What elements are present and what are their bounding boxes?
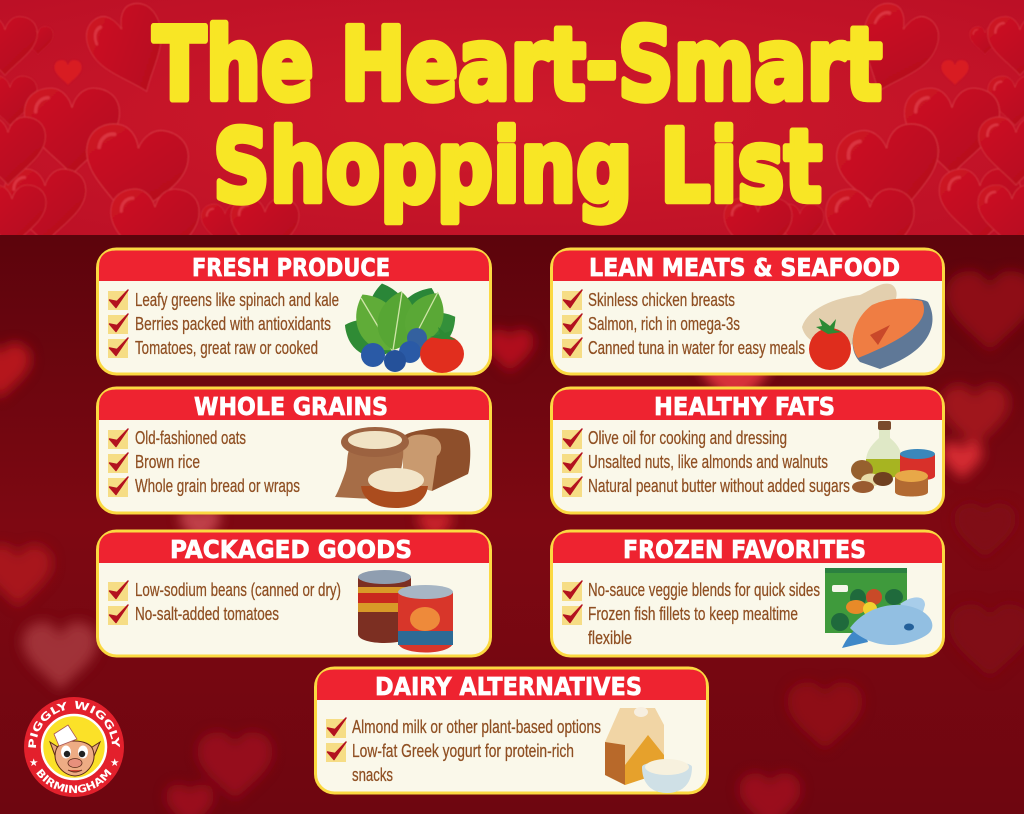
icon: milk carton and yogurt bowl bbox=[605, 707, 692, 793]
heading: lean meats and seafood: LEAN MEATS & SEAFOOD bbox=[589, 253, 900, 282]
checklist: whole grains: Old-fashioned oats bbox=[135, 427, 246, 448]
checklist: lean meats and seafood: Canned tuna in water for easy meals bbox=[588, 337, 805, 358]
checklist: frozen favorites: flexible bbox=[588, 627, 632, 648]
panel: lean meats and seafood bbox=[552, 249, 944, 374]
checklist: frozen favorites bbox=[562, 579, 820, 648]
heading: dairy alternatives: DAIRY ALTERNATIVES bbox=[375, 672, 642, 701]
heading: healthy fats: HEALTHY FATS bbox=[654, 392, 835, 421]
checklist: fresh produce: Berries packed with antioxidants bbox=[135, 313, 331, 334]
banner background with hearts bbox=[0, 0, 1024, 235]
panel: frozen favorites bbox=[552, 531, 944, 656]
icon: pig mascot face bbox=[50, 725, 100, 776]
lower background with blurred hearts bbox=[0, 235, 1024, 814]
title bbox=[153, 6, 882, 225]
checklist: healthy fats: Unsalted nuts, like almonds and walnuts bbox=[588, 451, 828, 472]
icon: olive oil, nuts and cans bbox=[851, 421, 935, 496]
checklist: lean meats and seafood: Skinless chicken breasts bbox=[588, 289, 735, 310]
heading: frozen favorites: FROZEN FAVORITES bbox=[623, 535, 866, 564]
panel: healthy fats bbox=[552, 388, 944, 513]
heading: fresh produce: FRESH PRODUCE bbox=[192, 253, 390, 282]
checklist: packaged goods bbox=[108, 579, 341, 625]
checklist: healthy fats: Natural peanut butter without added sugars bbox=[588, 475, 850, 496]
heading: whole grains: WHOLE GRAINS bbox=[194, 392, 388, 421]
checklist: packaged goods: No-salt-added tomatoes bbox=[135, 603, 279, 624]
checklist: dairy alternatives bbox=[326, 716, 601, 785]
icon: canned goods bbox=[358, 570, 453, 652]
checklist: dairy alternatives: snacks bbox=[352, 764, 393, 785]
checklist: fresh produce: Tomatoes, great raw or cooked bbox=[135, 337, 318, 358]
panel: fresh produce bbox=[98, 249, 490, 374]
checklist: healthy fats bbox=[562, 427, 850, 497]
checklist: whole grains: Whole grain bread or wraps bbox=[135, 475, 300, 496]
checklist: frozen favorites: Frozen fish fillets to keep mealtime bbox=[588, 603, 798, 624]
logo: Piggly Wiggly Birmingham bbox=[24, 697, 124, 797]
panel: packaged goods bbox=[98, 531, 490, 656]
icon: frozen vegetables and fish bbox=[825, 568, 932, 648]
checklist: frozen favorites: No-sauce veggie blends for quick sides bbox=[588, 579, 820, 600]
checklist: whole grains: Brown rice bbox=[135, 451, 200, 472]
logo: Piggly Wiggly Birmingham: BIRMINGHAM bbox=[36, 768, 112, 794]
icon: sack of oats, bread and bowl bbox=[335, 427, 470, 508]
checklist: packaged goods: Low-sodium beans (canned or dry) bbox=[135, 579, 341, 600]
checklist: dairy alternatives: Almond milk or other plant-based options bbox=[352, 716, 601, 737]
checklist: dairy alternatives: Low-fat Greek yogurt for protein-rich bbox=[352, 740, 574, 761]
checklist: healthy fats: Olive oil for cooking and dressing bbox=[588, 427, 787, 448]
panel: dairy alternatives bbox=[316, 668, 708, 793]
checklist: fresh produce bbox=[108, 289, 339, 358]
panel: whole grains bbox=[98, 388, 490, 513]
checklist: lean meats and seafood: Salmon, rich in omega-3s bbox=[588, 313, 740, 334]
logo: Piggly Wiggly Birmingham: ★ bbox=[29, 757, 38, 769]
checklist: fresh produce: Leafy greens like spinach and kale bbox=[135, 289, 339, 310]
checklist: whole grains bbox=[108, 427, 300, 497]
logo: Piggly Wiggly Birmingham: ★ bbox=[110, 757, 119, 769]
logo: Piggly Wiggly Birmingham: PIGGLY WIGGLY bbox=[28, 700, 120, 748]
checklist: lean meats and seafood bbox=[562, 289, 805, 358]
icon: chicken, salmon and tomato bbox=[802, 284, 932, 370]
title: Shopping List bbox=[213, 108, 822, 225]
icon: spinach, blueberries and tomato bbox=[337, 279, 464, 373]
heading: packaged goods: PACKAGED GOODS bbox=[170, 535, 412, 564]
